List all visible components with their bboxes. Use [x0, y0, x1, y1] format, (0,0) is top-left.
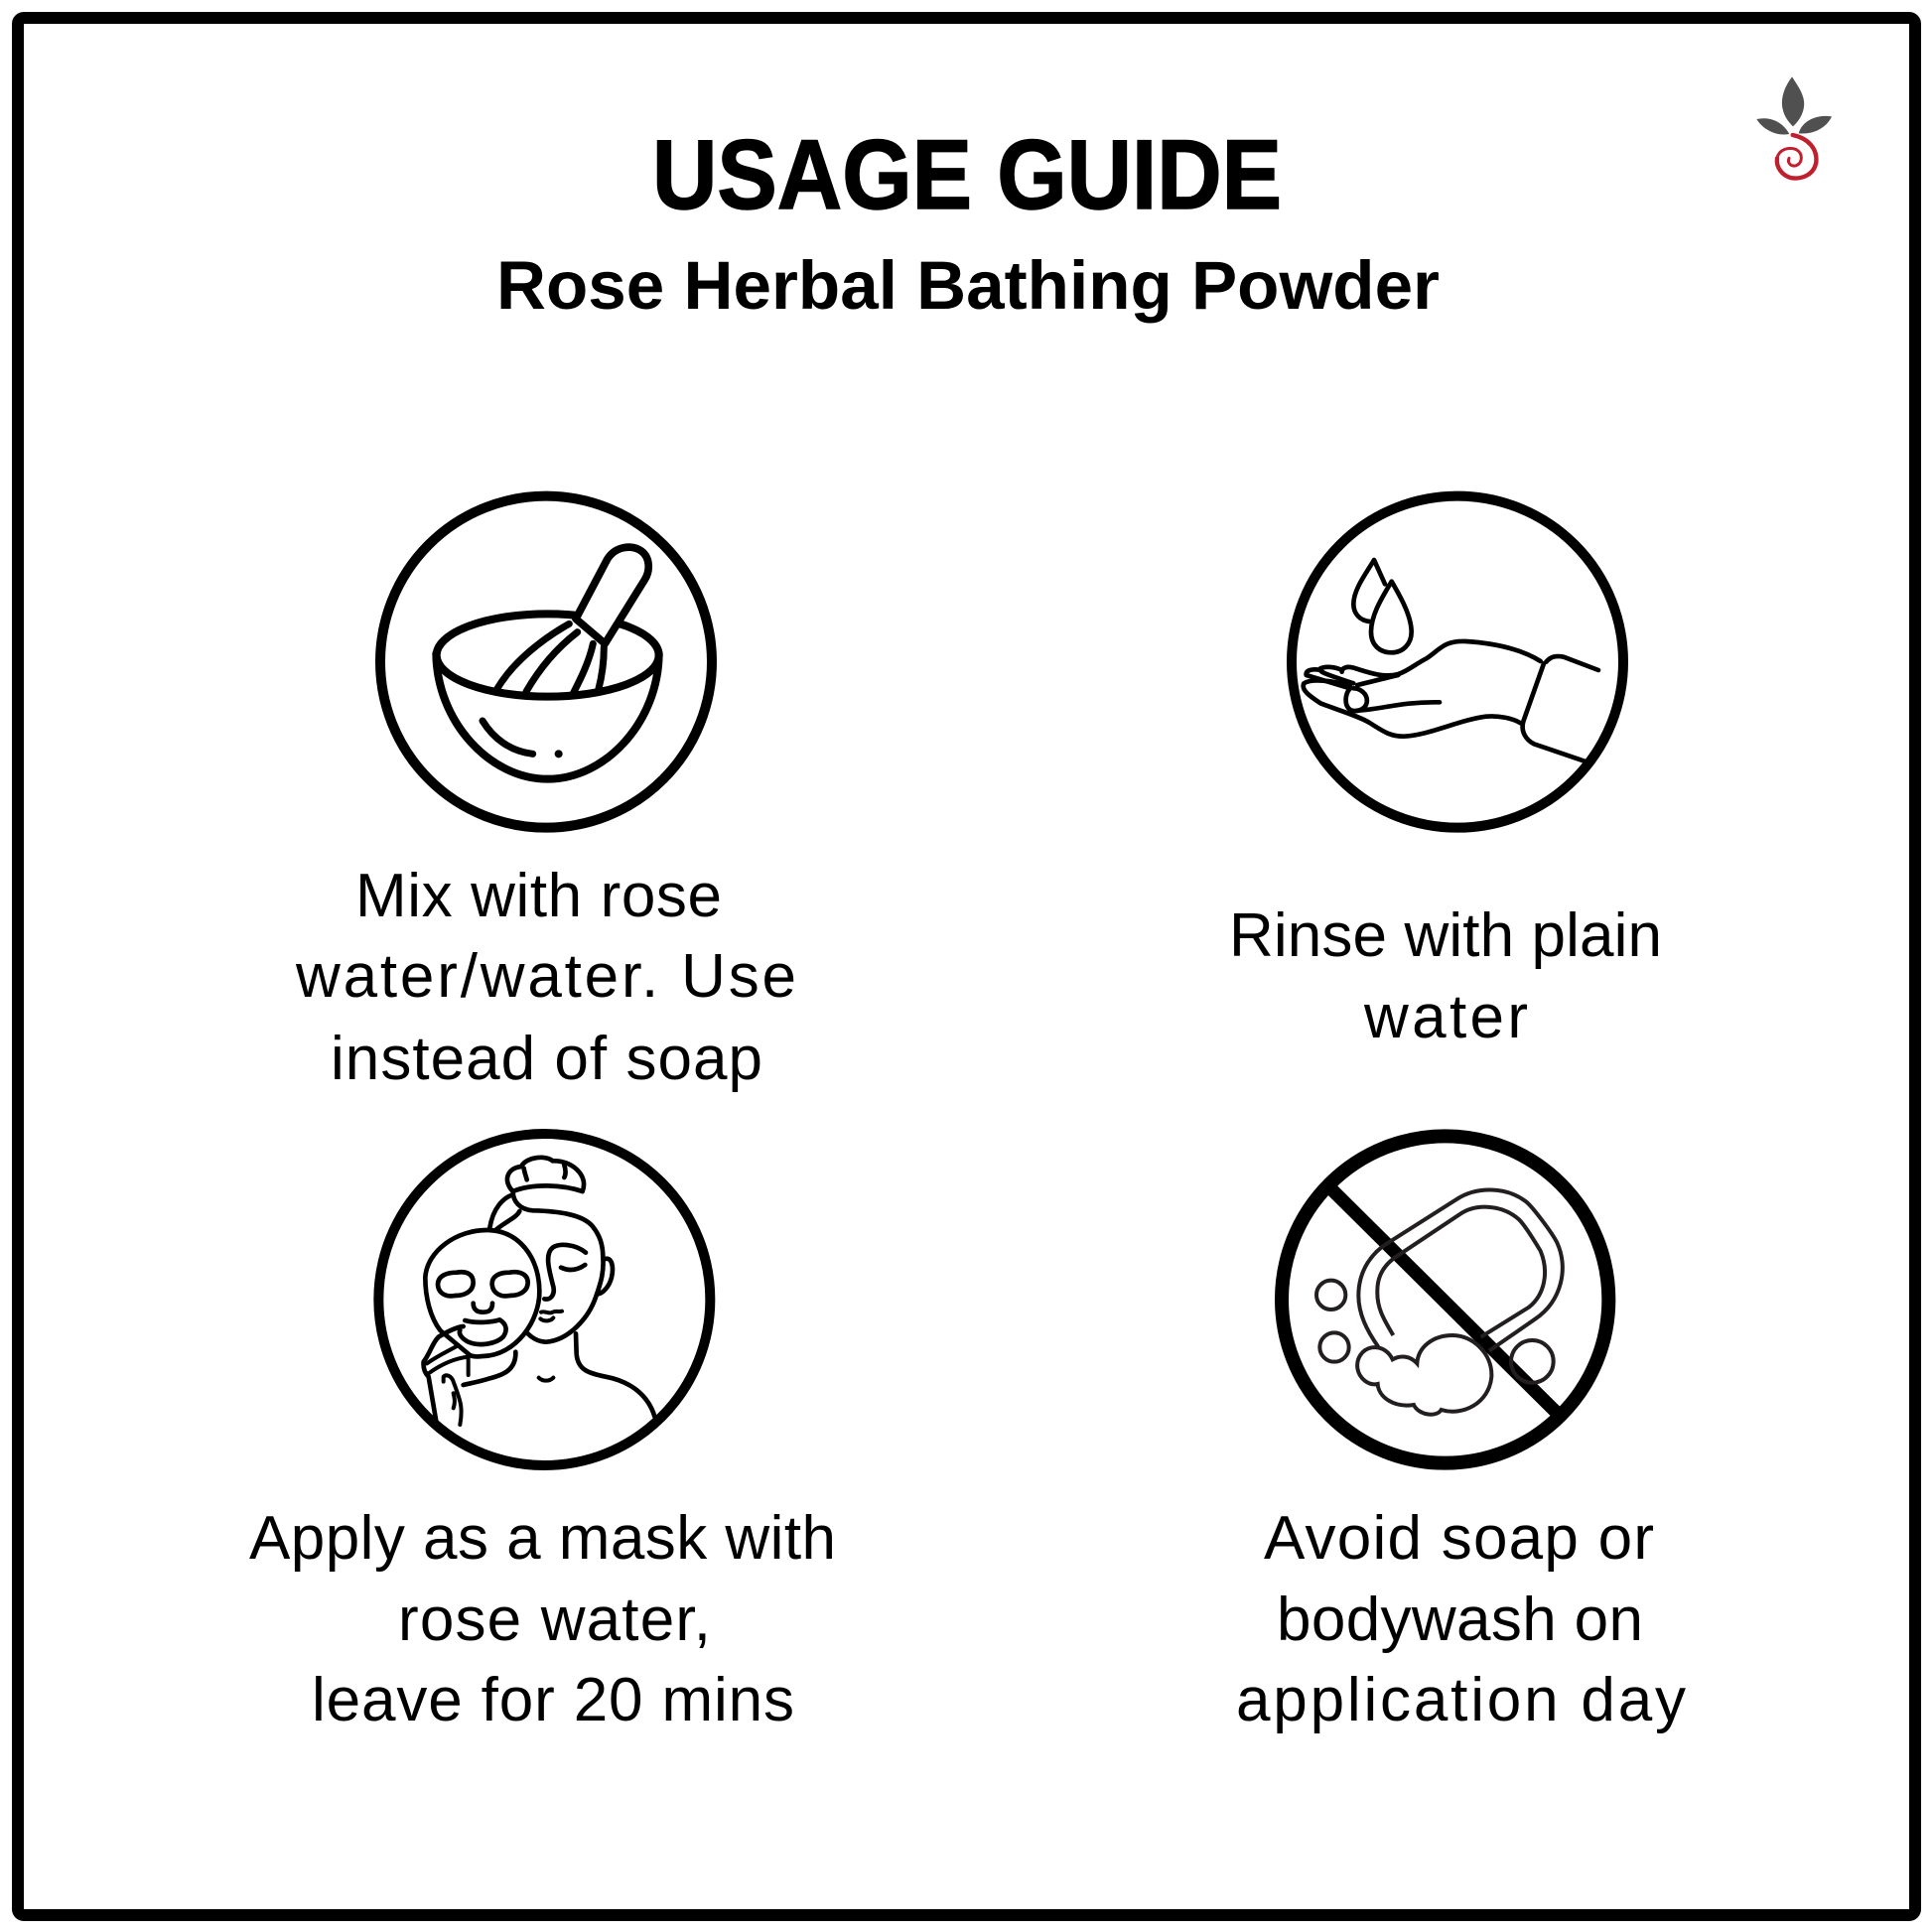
text: mask instructions: [249, 1504, 836, 1734]
panel: rinse step: [1229, 496, 1662, 1051]
text: avoid soap instructions: Avoid soap or: [1264, 1504, 1654, 1573]
panel: mix step: [295, 496, 796, 1093]
text: avoid soap instructions: [1236, 1504, 1686, 1734]
icon: hand and water drops: [1292, 496, 1623, 828]
title: USAGE GUIDE: [652, 119, 1282, 229]
logo: leaves and red spiral: [1756, 76, 1832, 179]
text: rinse instructions: [1229, 901, 1662, 1051]
panel: mask step: [249, 1134, 836, 1734]
text: mask instructions: Apply as a mask with: [249, 1504, 836, 1573]
panel: avoid soap step: [1236, 1136, 1686, 1734]
text: mask instructions: leave for 20 mins: [312, 1666, 794, 1734]
text: rinse instructions: Rinse with plain: [1229, 901, 1662, 970]
subtitle: Rose Herbal Bathing Powder: [496, 247, 1440, 324]
text: mix instructions: water/water. Use: [295, 942, 796, 1011]
text: avoid soap instructions: application day: [1236, 1666, 1686, 1734]
text: mix instructions: Mix with rose: [355, 862, 722, 930]
icon: prohibited soap bar: [1282, 1136, 1608, 1463]
text: mix instructions: [295, 862, 796, 1093]
text: rinse instructions: water: [1363, 983, 1528, 1051]
text: avoid soap instructions: bodywash on: [1277, 1586, 1643, 1654]
icon: bowl and whisk: [380, 496, 712, 828]
icon: woman holding face mask: [378, 1134, 710, 1465]
text: mask instructions: rose water,: [398, 1586, 711, 1654]
text: mix instructions: instead of soap: [331, 1025, 762, 1093]
